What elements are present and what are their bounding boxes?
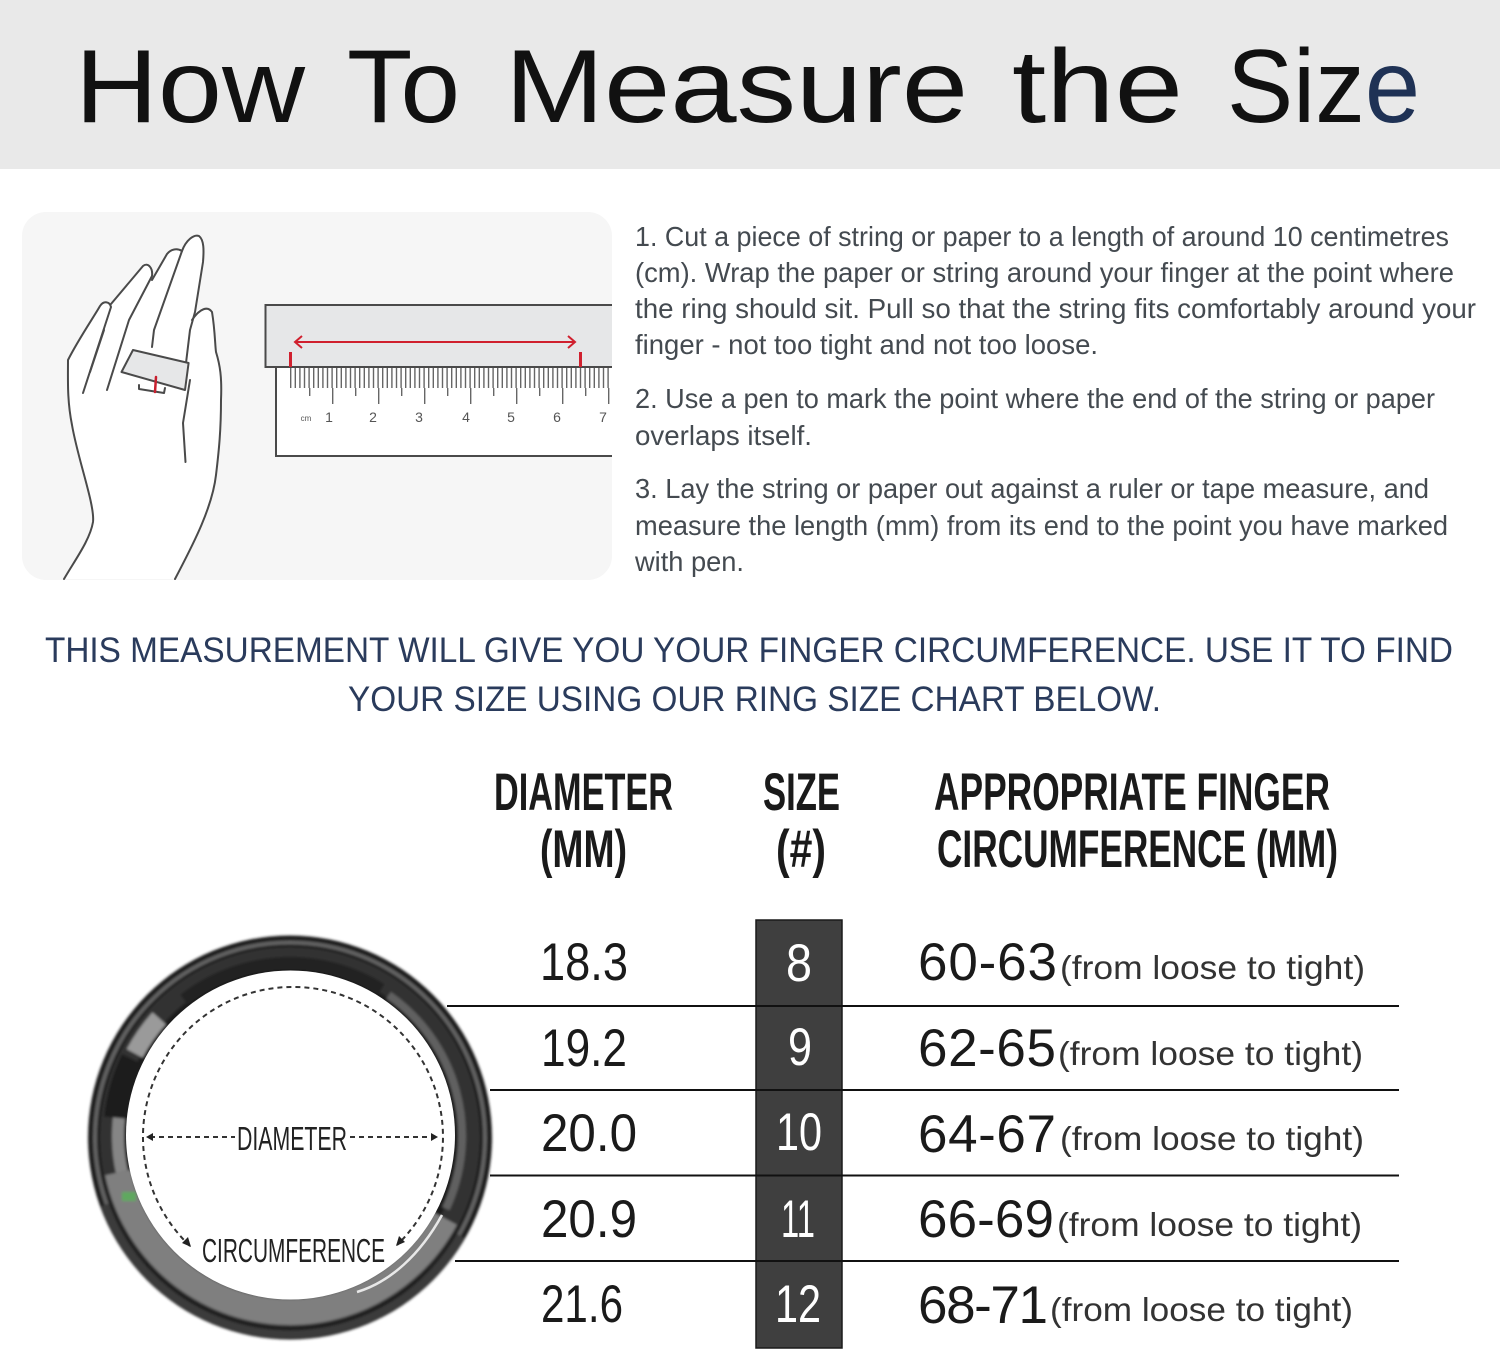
- title: Measure: [505, 29, 968, 145]
- circumference values: 64-67: [918, 1105, 1056, 1164]
- circumference values: (from loose to tight): [1057, 1206, 1362, 1243]
- diameter label: DIAMETER: [237, 1120, 347, 1157]
- icon: hand with paper strip: [64, 236, 221, 579]
- title: the: [1012, 29, 1183, 145]
- title: To: [347, 29, 460, 145]
- ring highlight: [357, 1215, 442, 1292]
- circumference values: 60-63: [918, 933, 1057, 992]
- circumference values: [918, 933, 1365, 1335]
- callout: measurement note: THIS MEASUREMENT WILL GIVE YOU YOUR FINGER CIRCUMFERENCE. USE IT TO FIND: [45, 631, 1453, 670]
- diameter values: 20.9: [541, 1190, 637, 1249]
- step 1: the ring should sit. Pull so that the string fits comfortably around your: [635, 293, 1476, 324]
- ruler: 5: [507, 409, 515, 425]
- ruler: 1: [325, 409, 333, 425]
- circumference values: (from loose to tight): [1058, 1035, 1363, 1072]
- circumference values: 62-65: [918, 1019, 1056, 1078]
- ruler: [266, 305, 612, 456]
- step 1: [635, 221, 1476, 360]
- diameter dashed arrow: [146, 1133, 438, 1247]
- title: How: [75, 29, 306, 145]
- ruler: 3: [415, 409, 423, 425]
- step 3: 3. Lay the string or paper out against a ruler or tape measure, and: [635, 473, 1429, 504]
- step 2: 2. Use a pen to mark the point where the end of the string or paper: [635, 383, 1435, 414]
- size values: 8: [786, 934, 812, 993]
- title: Size: [1227, 29, 1420, 145]
- table row lines: [447, 1006, 1399, 1261]
- callout: measurement note: [45, 631, 1453, 719]
- ruler: 6: [553, 409, 561, 425]
- diameter values: 19.2: [541, 1019, 627, 1078]
- size values: 10: [776, 1103, 822, 1162]
- circumference values: 66-69: [918, 1190, 1054, 1249]
- circumference values: (from loose to tight): [1060, 949, 1365, 986]
- step 3: [634, 473, 1448, 577]
- circumference label: CIRCUMFERENCE: [202, 1232, 385, 1269]
- callout: measurement note: YOUR SIZE USING OUR RING SIZE CHART BELOW.: [348, 680, 1161, 719]
- header: finger circumference: [934, 763, 1338, 879]
- size values: 11: [781, 1190, 815, 1249]
- arrow: measured length: [290, 336, 580, 367]
- icon: green sensor light: [122, 1192, 136, 1201]
- step 3: measure the length (mm) from its end to the point you have marked: [635, 510, 1448, 541]
- step 1: finger - not too tight and not too loose.: [635, 329, 1098, 360]
- ruler: cm: [301, 414, 312, 423]
- header: size: SIZE: [763, 763, 840, 822]
- header: diameter: DIAMETER: [494, 763, 673, 822]
- panel: hand and ruler illustration: [22, 212, 612, 580]
- circumference values: 68-71: [918, 1276, 1048, 1335]
- header: size: [763, 763, 840, 879]
- size values: 9: [788, 1018, 812, 1077]
- header: diameter: [494, 763, 673, 879]
- size values: 12: [775, 1275, 821, 1334]
- diameter values: [540, 933, 637, 1334]
- title: [75, 29, 1420, 145]
- circumference values: (from loose to tight): [1060, 1120, 1364, 1157]
- circumference values: (from loose to tight): [1050, 1291, 1353, 1328]
- size column: [756, 920, 842, 1348]
- diameter values: 21.6: [541, 1275, 623, 1334]
- step 2: overlaps itself.: [635, 420, 812, 451]
- size values: [775, 934, 822, 1334]
- title banner: [0, 0, 1500, 169]
- header: size: (#): [776, 820, 826, 879]
- header: diameter: (MM): [540, 820, 627, 879]
- diameter values: 18.3: [540, 933, 628, 992]
- diameter values: 20.0: [541, 1104, 637, 1163]
- ring illustration: [21, 868, 559, 1351]
- ruler: 4: [462, 409, 470, 425]
- instructions text: [634, 221, 1476, 577]
- ruler: 7: [599, 409, 607, 425]
- circumference dashed arc: [143, 987, 443, 1246]
- step 2: [635, 383, 1435, 451]
- step 3: with pen.: [634, 546, 744, 577]
- step 1: 1. Cut a piece of string or paper to a length of around 10 centimetres: [635, 221, 1449, 252]
- step 1: (cm). Wrap the paper or string around your finger at the point where: [635, 257, 1454, 288]
- table column headers: [494, 763, 1338, 879]
- ruler: 2: [369, 409, 377, 425]
